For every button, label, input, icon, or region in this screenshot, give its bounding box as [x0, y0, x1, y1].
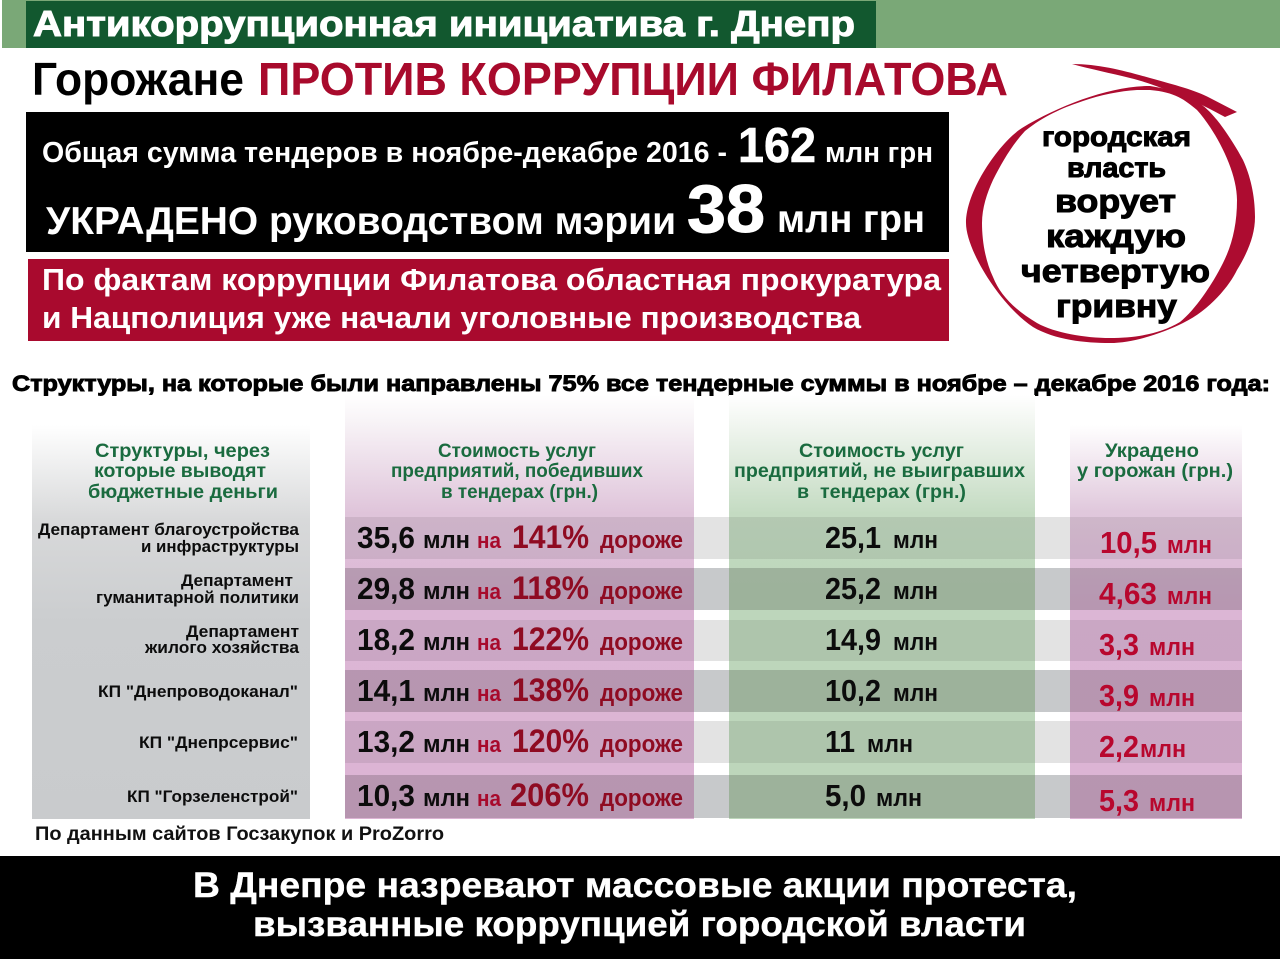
footer banner — [0, 856, 1280, 959]
column heading: winners: в тендерах (грн.) — [441, 482, 598, 503]
losers values: млн — [867, 731, 913, 758]
row 1: млн — [423, 527, 470, 554]
column heading: losers: предприятий, не выигравших — [734, 461, 1025, 482]
callout text: ворует — [1055, 183, 1176, 219]
losers values: млн — [893, 527, 938, 554]
row 2 — [357, 570, 683, 606]
column heading: structures: бюджетные деньги — [88, 482, 278, 503]
row 3: дороже — [600, 629, 683, 656]
losers values: 11 — [825, 724, 855, 759]
header title: Антикоррупционная инициатива г. Днепр — [33, 3, 855, 44]
icon: circle ring — [966, 86, 1255, 343]
row 4: млн — [423, 680, 470, 707]
callout text: гривну — [1056, 288, 1177, 324]
row 2: млн — [423, 578, 470, 605]
row labels: Департамент благоустройства — [38, 520, 300, 539]
section heading: Структуры, на которые были направлены 75% все тендерные суммы в ноябре – декабре 2016 года: — [12, 371, 1270, 396]
panel: tender totals: 162 — [738, 119, 816, 173]
callout text: каждую — [1046, 218, 1186, 254]
row 6: дороже — [600, 785, 683, 812]
stolen values: 2,2 — [1099, 729, 1139, 764]
column heading: structures: которые выводят — [94, 461, 266, 482]
column heading: structures — [88, 441, 278, 503]
column heading: stolen — [1077, 441, 1233, 482]
row 1: дороже — [600, 527, 683, 554]
panel: tender totals: млн грн — [777, 198, 925, 241]
row 6 — [357, 777, 683, 813]
row 3: 122% — [512, 621, 589, 657]
callout: red hand-drawn circle — [966, 64, 1255, 343]
row 4: 138% — [512, 672, 589, 708]
row labels: КП "Днепрсервис" — [139, 733, 298, 752]
main title: ПРОТИВ КОРРУПЦИИ ФИЛАТОВА — [258, 53, 1008, 105]
row 5: 13,2 — [357, 724, 415, 759]
column backgrounds — [32, 395, 1242, 819]
row 5: дороже — [600, 731, 683, 758]
column heading: losers — [734, 441, 1025, 503]
row labels: Департамент — [181, 571, 293, 590]
row labels: КП "Днепроводоканал" — [98, 682, 298, 701]
row labels: Департамент — [186, 622, 299, 641]
stolen values: 5,3 — [1099, 783, 1139, 818]
row 6: на — [477, 786, 502, 811]
losers values: 10,2 — [825, 673, 881, 708]
stolen values: 3,9 — [1099, 678, 1139, 713]
row 5: млн — [423, 731, 470, 758]
row 3: млн — [423, 629, 470, 656]
callout text: четвертую — [1021, 253, 1210, 289]
row 1: на — [477, 528, 502, 553]
column heading: stolen: у горожан (грн.) — [1077, 461, 1233, 482]
panel: prosecution notice: По фактам коррупции Филатова областная прокуратура — [42, 262, 942, 297]
icon: circle tail — [1072, 64, 1237, 117]
stolen values: 4,63 — [1099, 576, 1157, 611]
panel: tender totals — [26, 112, 949, 252]
stolen values: млн — [1140, 736, 1186, 763]
column heading: winners: предприятий, победивших — [391, 461, 643, 482]
row 1 — [357, 519, 683, 555]
row labels: жилого хозяйства — [144, 638, 300, 657]
losers values: млн — [893, 680, 938, 707]
row 5 — [357, 723, 683, 759]
stolen values: 10,5 — [1100, 525, 1157, 560]
stolen values: млн — [1149, 685, 1195, 712]
panel: tender totals: млн грн — [825, 137, 933, 169]
panel: prosecution notice: и Нацполиция уже начали уголовные производства — [42, 300, 862, 335]
row 5: на — [477, 732, 502, 757]
row 6: 10,3 — [357, 778, 415, 813]
row 2: 118% — [512, 570, 589, 606]
losers values: 5,0 — [825, 778, 866, 813]
row 6: млн — [423, 785, 470, 812]
row labels: КП "Горзеленстрой" — [127, 787, 298, 806]
row 4: 14,1 — [357, 673, 415, 708]
row 2: на — [477, 579, 502, 604]
callout text — [1021, 121, 1210, 324]
panel: tender totals: 38 — [687, 171, 765, 247]
footer banner: вызванные коррупцией городской власти — [253, 905, 1026, 944]
stolen values: млн — [1149, 634, 1195, 661]
row 4 — [357, 672, 683, 708]
panel: tender totals: Общая сумма тендеров в ноябре-декабре 2016 - — [42, 137, 727, 169]
winners values — [357, 519, 683, 813]
panel: prosecution notice — [28, 259, 949, 341]
column heading: structures: Структуры, через — [95, 441, 270, 462]
row 2: дороже — [600, 578, 683, 605]
row 1: 141% — [512, 519, 589, 555]
column heading: losers: в тендерах (грн.) — [797, 482, 966, 503]
callout text: власть — [1067, 152, 1166, 183]
callout text: городская — [1042, 121, 1191, 152]
losers values: млн — [876, 785, 922, 812]
row 2: 29,8 — [357, 571, 415, 606]
column heading: losers: Стоимость услуг — [799, 441, 964, 462]
header band — [2, 0, 1280, 48]
row 4: дороже — [600, 680, 683, 707]
row 1: 35,6 — [357, 520, 415, 555]
column heading: winners — [391, 441, 643, 503]
row 5: 120% — [512, 723, 589, 759]
losers values: 25,1 — [825, 520, 881, 555]
stolen values: млн — [1167, 532, 1212, 559]
footer banner: В Днепре назревают массовые акции протеста, — [193, 866, 1077, 905]
row 3 — [357, 621, 683, 657]
stolen values: млн — [1149, 790, 1195, 817]
row 4: на — [477, 681, 502, 706]
row 6: 206% — [510, 777, 589, 813]
row stripes — [345, 517, 1242, 818]
stolen values: млн — [1167, 583, 1212, 610]
row labels: гуманитарной политики — [96, 588, 299, 607]
panel: tender totals: УКРАДЕНО руководством мэрии — [46, 200, 676, 243]
losers values — [825, 520, 938, 813]
stolen values — [1099, 525, 1212, 818]
stolen values: 3,3 — [1099, 627, 1139, 662]
column heading: stolen: Украдено — [1105, 441, 1199, 462]
main title: Горожане — [32, 53, 244, 105]
losers values: 25,2 — [825, 571, 881, 606]
row 3: 18,2 — [357, 622, 415, 657]
losers values: млн — [893, 578, 938, 605]
losers values: млн — [893, 629, 938, 656]
row labels — [38, 520, 300, 806]
losers values: 14,9 — [825, 622, 881, 657]
row 3: на — [477, 630, 502, 655]
source note: По данным сайтов Госзакупок и ProZorro — [35, 824, 444, 845]
row labels: и инфраструктуры — [141, 537, 299, 556]
table — [32, 395, 1242, 819]
column heading: winners: Стоимость услуг — [438, 441, 596, 462]
